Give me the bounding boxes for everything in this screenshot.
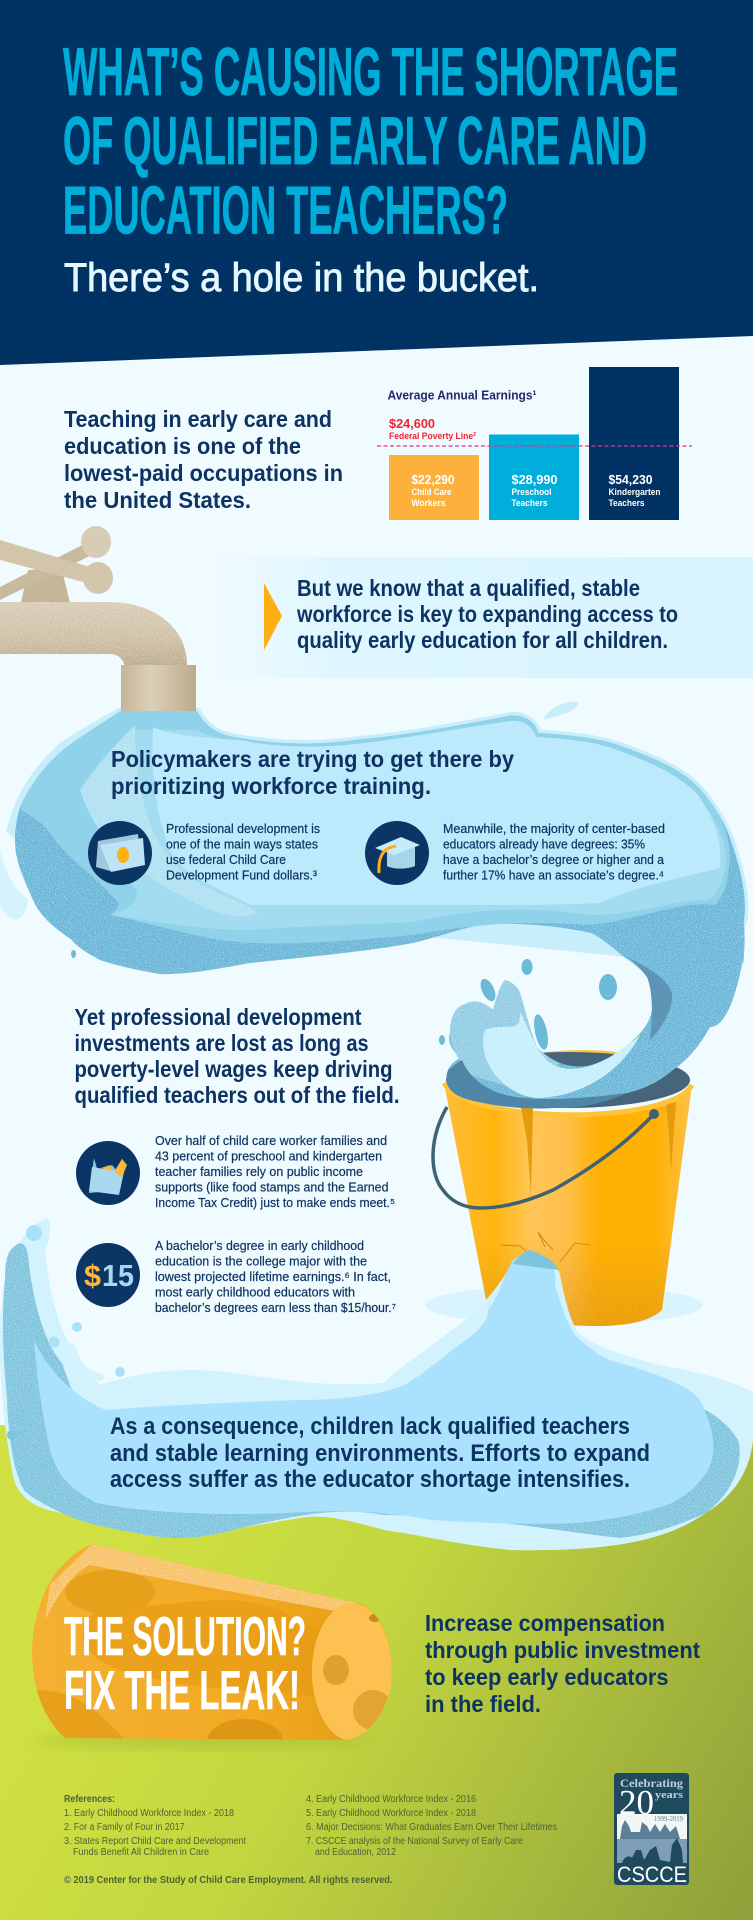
sponge top highlight [45, 1544, 358, 1620]
text: increase compensation: in the field. [425, 1691, 541, 1717]
pool textured edge [3, 1243, 740, 1538]
text: lowest-paid occupations [64, 406, 343, 513]
bucket folds [521, 1102, 676, 1195]
bar: kindergarten teachers: $54,230 [608, 473, 653, 487]
icon: graduation cap [365, 821, 429, 885]
text: lowest-paid occupations: lowest-paid occupations in [64, 460, 343, 486]
references column 1: 1. Early Childhood Workforce Index - 2018 [64, 1808, 234, 1819]
references column 2: 4. Early Childhood Workforce Index - 2016 [306, 1794, 476, 1805]
text: investments lost: poverty-level wages keep driving [74, 1056, 392, 1082]
bar: child care workers: $22,290 [412, 473, 455, 487]
text: lowest lifetime earnings: education is the college major with the [155, 1254, 367, 1268]
text: lowest lifetime earnings: bachelor’s degrees earn less than $15/hour.⁷ [155, 1300, 396, 1315]
subtitle: There’s a hole in the bucket. [64, 256, 539, 300]
text: center-based educators [443, 821, 665, 882]
icon: money [88, 821, 152, 885]
text: qualified workforce: But we know that a qualified, stable [297, 575, 640, 601]
text: lowest-paid occupations: the United States. [64, 487, 251, 513]
water body [15, 711, 745, 1108]
title [63, 34, 678, 248]
logo: CSCCE 20 years: CSCCE [617, 1862, 687, 1887]
puddle under bucket [425, 1285, 703, 1325]
references column 1: 2. For a Family of Four in 2017 [64, 1822, 185, 1833]
icon: $15 [76, 1243, 140, 1307]
sponge shadow [35, 1735, 375, 1747]
logo silhouettes [620, 1820, 680, 1839]
band: qualified workforce [206, 557, 753, 678]
text: professional development: Professional development is [166, 821, 320, 836]
text: qualified workforce: workforce is key to expanding access to [296, 601, 678, 627]
bar: preschool teachers: Preschool [512, 487, 552, 498]
pool outer pale layer [0, 1218, 753, 1550]
sponge [32, 1544, 392, 1740]
bar chart: average annual earnings [377, 367, 692, 520]
text: professional development [166, 821, 320, 882]
text: public income supports: 43 percent of preschool and kindergarten [155, 1148, 382, 1164]
bar: preschool teachers: Teachers [512, 498, 548, 509]
text: center-based educators: educators already have degrees: 35% [443, 836, 645, 852]
icon: arrow [264, 583, 282, 650]
hole water tint [513, 1250, 558, 1270]
bar: preschool teachers [489, 434, 579, 520]
text: lowest lifetime earnings: lowest projected lifetime earnings.⁶ In fact, [155, 1269, 391, 1284]
logo: CSCCE 20 years: 1999-2019 [654, 1815, 683, 1823]
text: consequence: and stable learning environments. Efforts to expand [110, 1440, 650, 1467]
references column 2: 7. CSCCE analysis of the National Survey of Early Care [306, 1836, 523, 1847]
water left and upper tone [20, 711, 730, 943]
poverty line label: $24,600 [389, 416, 435, 431]
splash drops [7, 1225, 125, 1440]
bar: preschool teachers: $28,990 [512, 473, 558, 487]
text: center-based educators: Meanwhile, the majority of center-based [443, 821, 665, 836]
references column 2: 5. Early Childhood Workforce Index - 2018 [306, 1808, 476, 1819]
bucket back rim [538, 1050, 626, 1062]
logo: CSCCE 20 years [614, 1773, 689, 1887]
logo: CSCCE 20 years: 20 [619, 1783, 654, 1822]
curl dark base [446, 1060, 627, 1108]
bar: kindergarten teachers: Teachers [608, 498, 644, 509]
faucet stem [20, 570, 71, 607]
copyright: © 2019 Center for the Study of Child Care Employment. All rights reserved. [64, 1875, 393, 1886]
icon: $15: $ [84, 1258, 101, 1293]
poverty line label: Federal Poverty Line² [389, 431, 476, 442]
text: lowest-paid occupations: Teaching in early care and [64, 406, 332, 432]
water stream from faucet to bucket [10, 711, 745, 1108]
water light center [152, 721, 720, 905]
text: public income supports [155, 1133, 395, 1210]
sponge holes [65, 1570, 155, 1614]
text: investments lost: Yet professional development [74, 1004, 362, 1030]
text: center-based educators: have a bachelor’s degree or higher and a [443, 852, 665, 867]
water pool [0, 1218, 753, 1550]
icon: grocery bag [76, 1141, 140, 1205]
text: consequence [110, 1413, 650, 1493]
faucet handles [0, 526, 113, 600]
text: increase compensation [425, 1610, 700, 1717]
text: investments lost: investments are lost as long as [74, 1030, 368, 1056]
bucket [444, 1050, 692, 1326]
bar: child care workers: Child Care [412, 487, 452, 498]
text: public income supports: Income Tax Credit) just to make ends meet.⁵ [155, 1195, 395, 1210]
references column 1 [64, 1794, 246, 1858]
references column 1: 3. States Report Child Care and Development [64, 1836, 246, 1847]
text: consequence: As a consequence, children lack qualified teachers [110, 1413, 630, 1440]
icon: $15: 15 [102, 1258, 134, 1293]
pool main water [34, 1250, 713, 1524]
text: qualified workforce [296, 575, 678, 653]
bucket body [444, 1083, 692, 1326]
text: professional development: use federal Child Care [166, 852, 286, 867]
poverty line label [389, 416, 476, 442]
text: increase compensation: to keep early educators [425, 1664, 668, 1690]
text: policymakers: Policymakers are trying to get there by [111, 746, 514, 772]
text: public income supports: supports (like food stamps and the Earned [155, 1180, 388, 1194]
bucket handle [433, 1107, 659, 1208]
bar: child care workers [389, 455, 479, 520]
text: increase compensation: through public investment [425, 1637, 700, 1663]
bar: kindergarten teachers [589, 367, 679, 520]
text: lowest lifetime earnings: A bachelor’s degree in early childhood [155, 1238, 364, 1253]
text: investments lost [74, 1004, 400, 1108]
water speckled highlight [80, 725, 257, 916]
sponge shaded band [82, 1600, 285, 1694]
water rim [10, 711, 745, 960]
curl upper ball [450, 980, 560, 1090]
faucet collar [121, 665, 196, 711]
references column 2: 6. Major Decisions: What Graduates Earn Over Their Lifetimes [306, 1822, 557, 1833]
logo: CSCCE 20 years: Celebrating [620, 1776, 683, 1790]
faucet [0, 526, 196, 711]
text: lowest lifetime earnings [155, 1238, 396, 1315]
solution heading: THE SOLUTION? [64, 1605, 306, 1667]
text: consequence: access suffer as the educator shortage intensifies. [110, 1466, 630, 1493]
deep stream shade [628, 958, 672, 1040]
bucket cracks [500, 1232, 590, 1262]
solution heading: FIX THE LEAK! [64, 1659, 300, 1721]
bar: kindergarten teachers: Kindergarten [608, 487, 661, 498]
sponge end cap [312, 1603, 392, 1741]
references column 2 [306, 1794, 557, 1858]
solution heading [64, 1605, 306, 1721]
faucet spout [0, 602, 187, 665]
references column 1: Funds Benefit All Children in Care [73, 1847, 209, 1858]
bucket interior [446, 1052, 690, 1108]
text: professional development: Development Fund dollars.³ [166, 868, 318, 882]
curl light center [483, 1012, 640, 1098]
text: investments lost: qualified teachers out of the field. [74, 1082, 400, 1108]
text: public income supports: teacher families rely on public income [155, 1164, 363, 1179]
chart title: Average Annual Earnings¹ [388, 388, 536, 402]
text: policymakers [111, 746, 514, 799]
text: lowest-paid occupations: education is one of the [64, 433, 301, 459]
water mid band [85, 721, 726, 930]
logo: CSCCE 20 years: years [655, 1789, 684, 1801]
text: increase compensation: Increase compensation [425, 1610, 665, 1636]
text: policymakers: prioritizing workforce training. [111, 773, 431, 799]
text: center-based educators: further 17% have an associate’s degree.⁴ [443, 868, 664, 882]
text: public income supports: Over half of child care worker families and [155, 1133, 387, 1148]
header panel [0, 0, 753, 365]
text: professional development: one of the main ways states [166, 836, 318, 852]
poverty line [377, 445, 692, 447]
grass background [0, 1425, 753, 1920]
bar: child care workers: Workers [412, 498, 446, 509]
text: qualified workforce: quality early education for all children. [297, 627, 668, 653]
references column 2: and Education, 2012 [315, 1847, 396, 1858]
references column 1: References: [64, 1794, 115, 1805]
water drops [0, 702, 617, 1051]
text: lowest lifetime earnings: most early childhood educators with [155, 1284, 355, 1300]
